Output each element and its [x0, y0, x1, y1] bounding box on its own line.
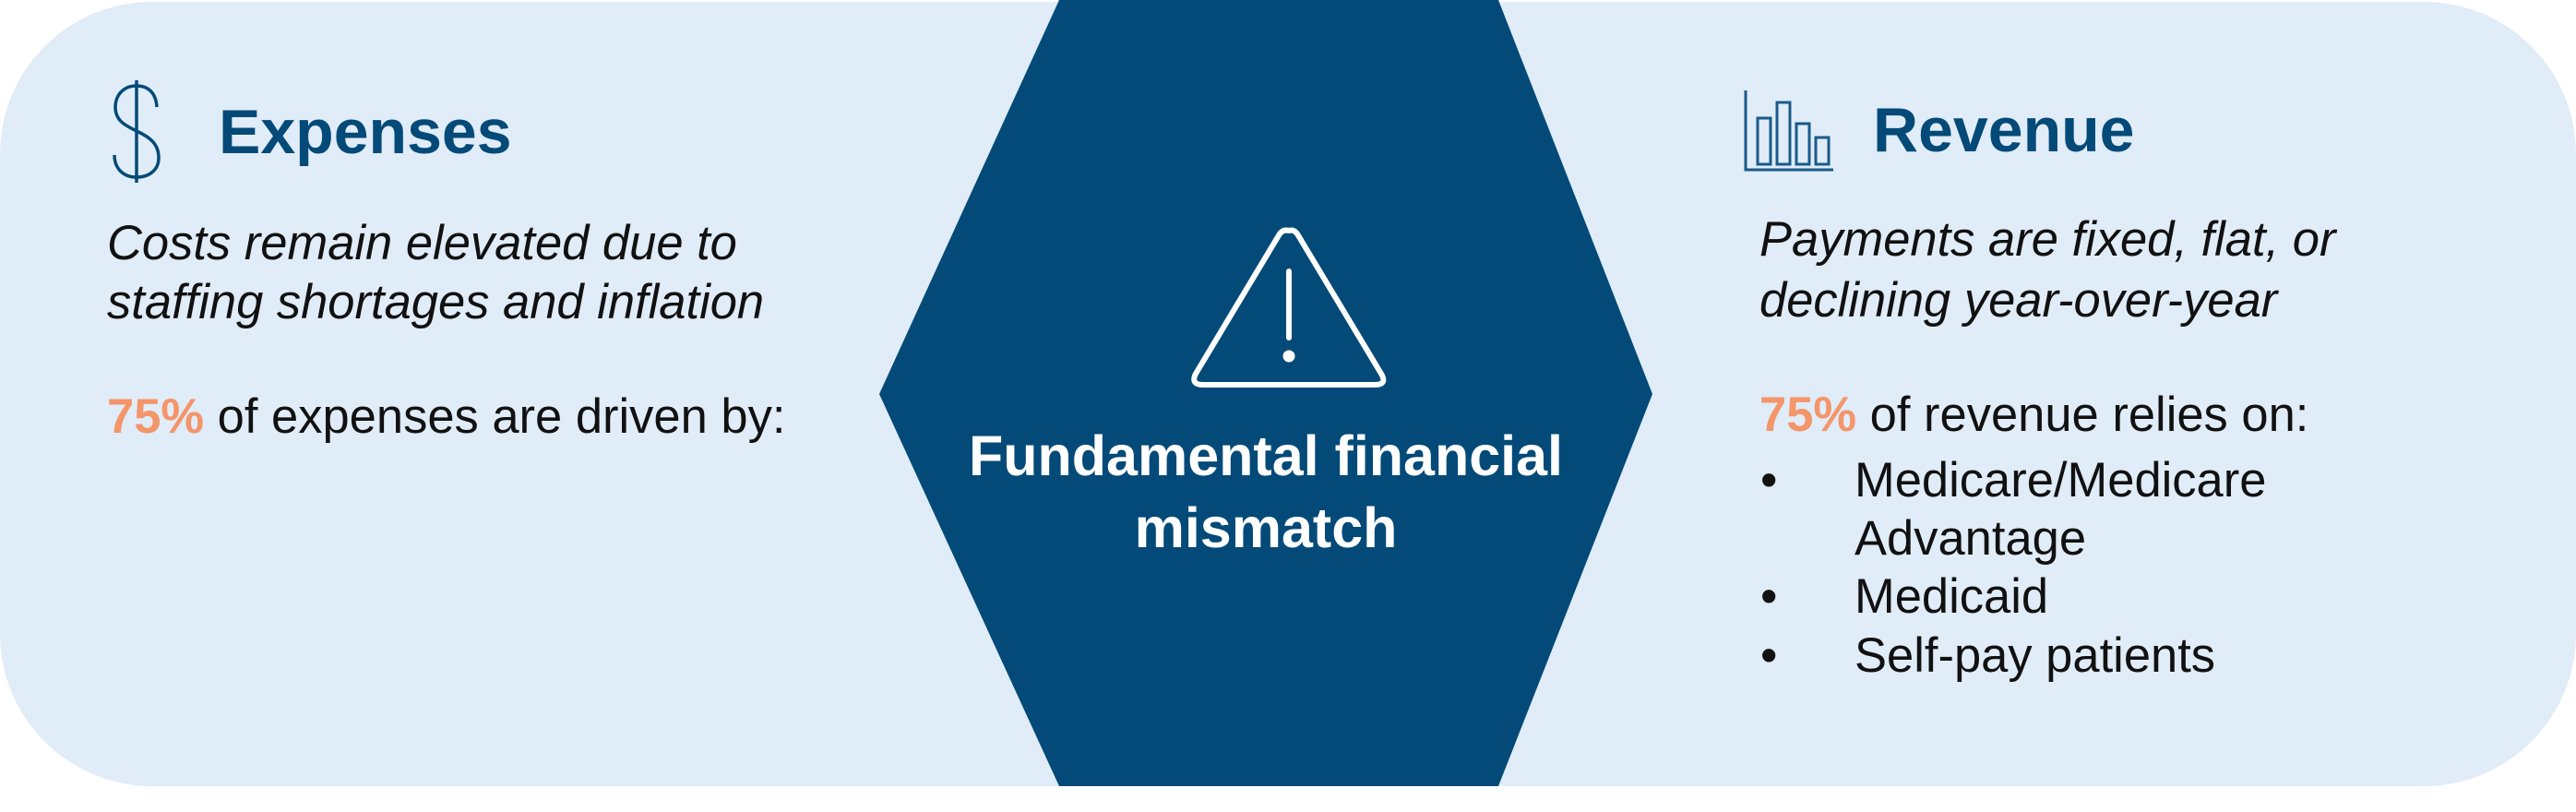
list: revenue sources — [1760, 453, 2266, 683]
list: revenue sources: Medicaid — [1854, 569, 2048, 624]
icon: bar chart — [1746, 90, 1833, 170]
list: revenue sources: • — [1760, 453, 1777, 508]
icon: warning triangle — [1194, 231, 1383, 385]
heading: Expenses: Expenses — [219, 97, 512, 167]
list: revenue sources: Medicare/Medicare — [1854, 453, 2266, 508]
panel: expenses — [107, 80, 785, 444]
text block: expenses description — [107, 216, 764, 329]
icon: dollar sign — [114, 80, 159, 183]
heading: Revenue: Revenue — [1873, 95, 2134, 165]
list: revenue sources: Advantage — [1854, 511, 2086, 566]
list: revenue sources: • — [1760, 628, 1777, 683]
text block: revenue description — [1759, 212, 2338, 328]
text block: expenses description: Costs remain elevated due to — [107, 216, 737, 270]
text block: revenue description: Payments are fixed, flat, or — [1759, 212, 2338, 267]
list: revenue sources: • — [1760, 569, 1777, 624]
text block: revenue 75%: 75% of revenue relies on: — [1759, 388, 2308, 442]
heading: Fundamental financial mismatch — [969, 424, 1563, 559]
list: revenue sources: Self-pay patients — [1854, 628, 2215, 683]
text block: revenue description: declining year-over-year — [1759, 273, 2280, 328]
hexagon: central mismatch — [879, 0, 1652, 786]
heading: Fundamental financial mismatch: Fundamental financial — [969, 424, 1563, 487]
text block: expenses description: staffing shortages and inflation — [107, 275, 764, 329]
text block: expenses 75%: 75% of expenses are driven by: — [107, 389, 785, 444]
heading: Fundamental financial mismatch: mismatch — [1135, 496, 1397, 559]
panel: revenue — [1746, 90, 2338, 683]
